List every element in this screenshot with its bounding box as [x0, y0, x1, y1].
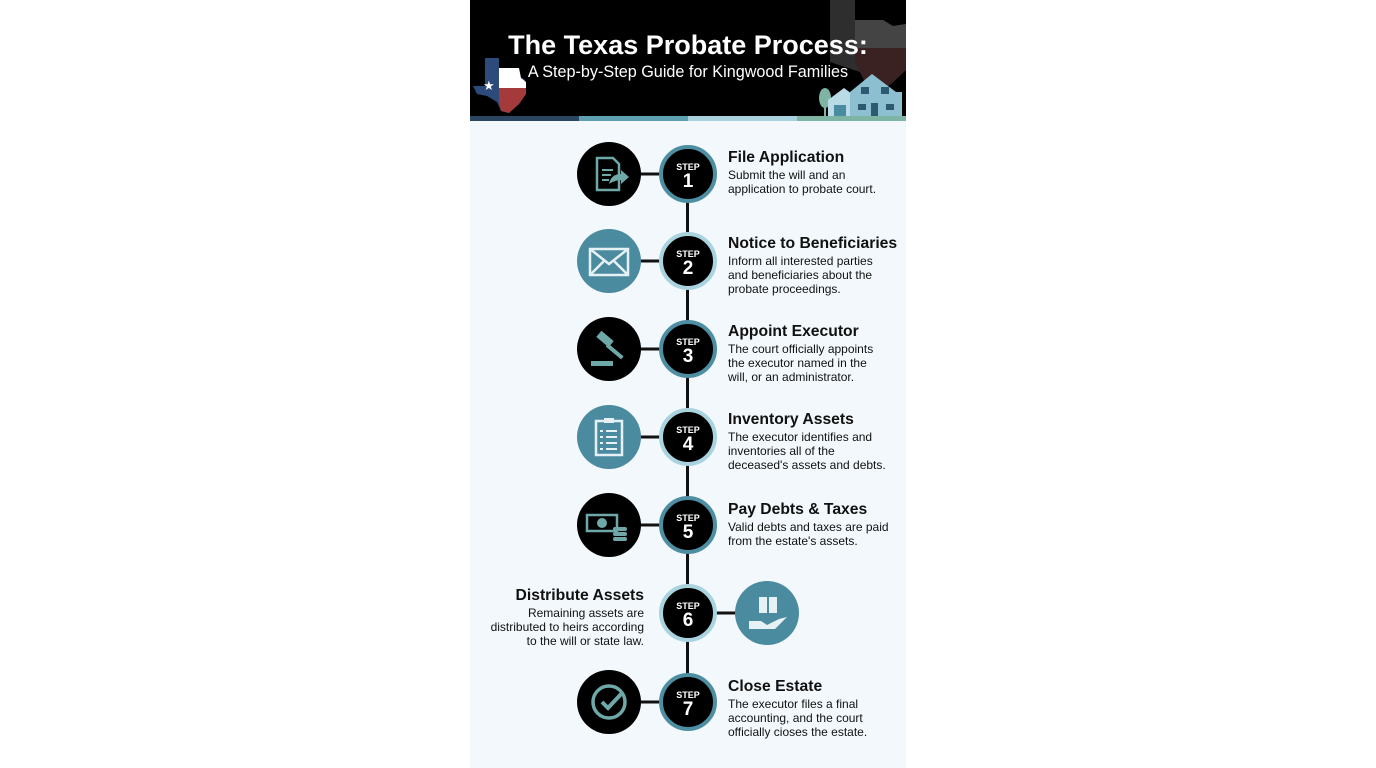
- subtitle: A Step-by-Step Guide for Kingwood Families: [528, 63, 848, 81]
- icon: texas flag map: ★: [483, 78, 495, 93]
- text 2: probate proceedings.: [728, 282, 841, 296]
- icon: gavel: [577, 317, 641, 381]
- text 1: Submit the will and an: [728, 168, 845, 182]
- step badge 2: STEP: [676, 249, 700, 259]
- card: [470, 0, 906, 768]
- text 6: distributed to heirs according: [491, 620, 644, 634]
- step badge 1: STEP: [676, 162, 700, 172]
- step 1: [577, 142, 876, 206]
- text 1: application to probate court.: [728, 182, 876, 196]
- icon: texas flag map: [473, 58, 526, 113]
- text 6: Distribute Assets: [516, 587, 644, 604]
- color stripe: [470, 116, 906, 121]
- text 4: [728, 411, 886, 472]
- text 3: Appoint Executor: [728, 323, 859, 340]
- text 2: Notice to Beneficiaries: [728, 235, 897, 252]
- step badge 5: 5: [683, 522, 693, 543]
- decoration: faded texas map: [830, 0, 906, 86]
- text 2: [728, 235, 897, 296]
- text 5: Pay Debts & Taxes: [728, 501, 867, 518]
- icon: document: [577, 142, 641, 206]
- text 1: [728, 149, 876, 196]
- step 3: [577, 317, 873, 384]
- step 6: [491, 581, 799, 648]
- step 4: [577, 405, 886, 472]
- text 7: The executor files a final: [728, 697, 858, 711]
- step badge 4: 4: [683, 434, 693, 455]
- text 7: Close Estate: [728, 678, 822, 695]
- text 1: File Application: [728, 149, 844, 166]
- text 4: inventories all of the: [728, 444, 835, 458]
- step badge 7: STEP: [676, 690, 700, 700]
- step badge 2: 2: [683, 258, 693, 279]
- text 5: from the estate's assets.: [728, 534, 858, 548]
- text 5: [728, 501, 889, 548]
- step badge 4: STEP: [676, 425, 700, 435]
- icon: money: [577, 493, 641, 557]
- text 6: to the will or state law.: [527, 634, 644, 648]
- step badge 7: [659, 673, 717, 731]
- text 3: will, or an administrator.: [728, 370, 854, 384]
- step badge 6: [659, 584, 717, 642]
- text 4: The executor identifies and: [728, 430, 872, 444]
- text 6: [491, 587, 644, 648]
- step badge 1: 1: [683, 171, 693, 192]
- icon: gift in hand: [735, 581, 799, 645]
- step badge 5: STEP: [676, 513, 700, 523]
- step badge 6: 6: [683, 610, 693, 631]
- step badge 5: [659, 496, 717, 554]
- step 5: [577, 493, 889, 557]
- text 4: Inventory Assets: [728, 411, 854, 428]
- step badge 3: STEP: [676, 337, 700, 347]
- text 3: [728, 323, 873, 384]
- header: [470, 0, 906, 116]
- text 2: and beneficiaries about the: [728, 268, 872, 282]
- title: The Texas Probate Process:: [508, 30, 868, 60]
- text 7: accounting, and the court: [728, 711, 863, 725]
- step badge 4: [659, 408, 717, 466]
- text 7: [728, 678, 867, 739]
- step badge 6: STEP: [676, 601, 700, 611]
- connectors: [640, 172, 736, 704]
- icon: houses: [819, 74, 902, 116]
- icon: check: [577, 670, 641, 734]
- text 6: Remaining assets are: [528, 606, 644, 620]
- step 7: [577, 670, 867, 739]
- step badge 3: 3: [683, 346, 693, 367]
- text 3: the executor named in the: [728, 356, 867, 370]
- step badge 7: 7: [683, 699, 693, 720]
- timeline line: [686, 174, 689, 702]
- step badge 2: [659, 232, 717, 290]
- step badge 1: [659, 145, 717, 203]
- step badge 3: [659, 320, 717, 378]
- icon: clipboard: [577, 405, 641, 469]
- text 4: deceased's assets and debts.: [728, 458, 886, 472]
- icon: envelope: [577, 229, 641, 293]
- text 2: Inform all interested parties: [728, 254, 873, 268]
- text 5: Valid debts and taxes are paid: [728, 520, 889, 534]
- step 2: [577, 229, 897, 296]
- text 7: officially cioses the estate.: [728, 725, 867, 739]
- text 3: The court officially appoints: [728, 342, 873, 356]
